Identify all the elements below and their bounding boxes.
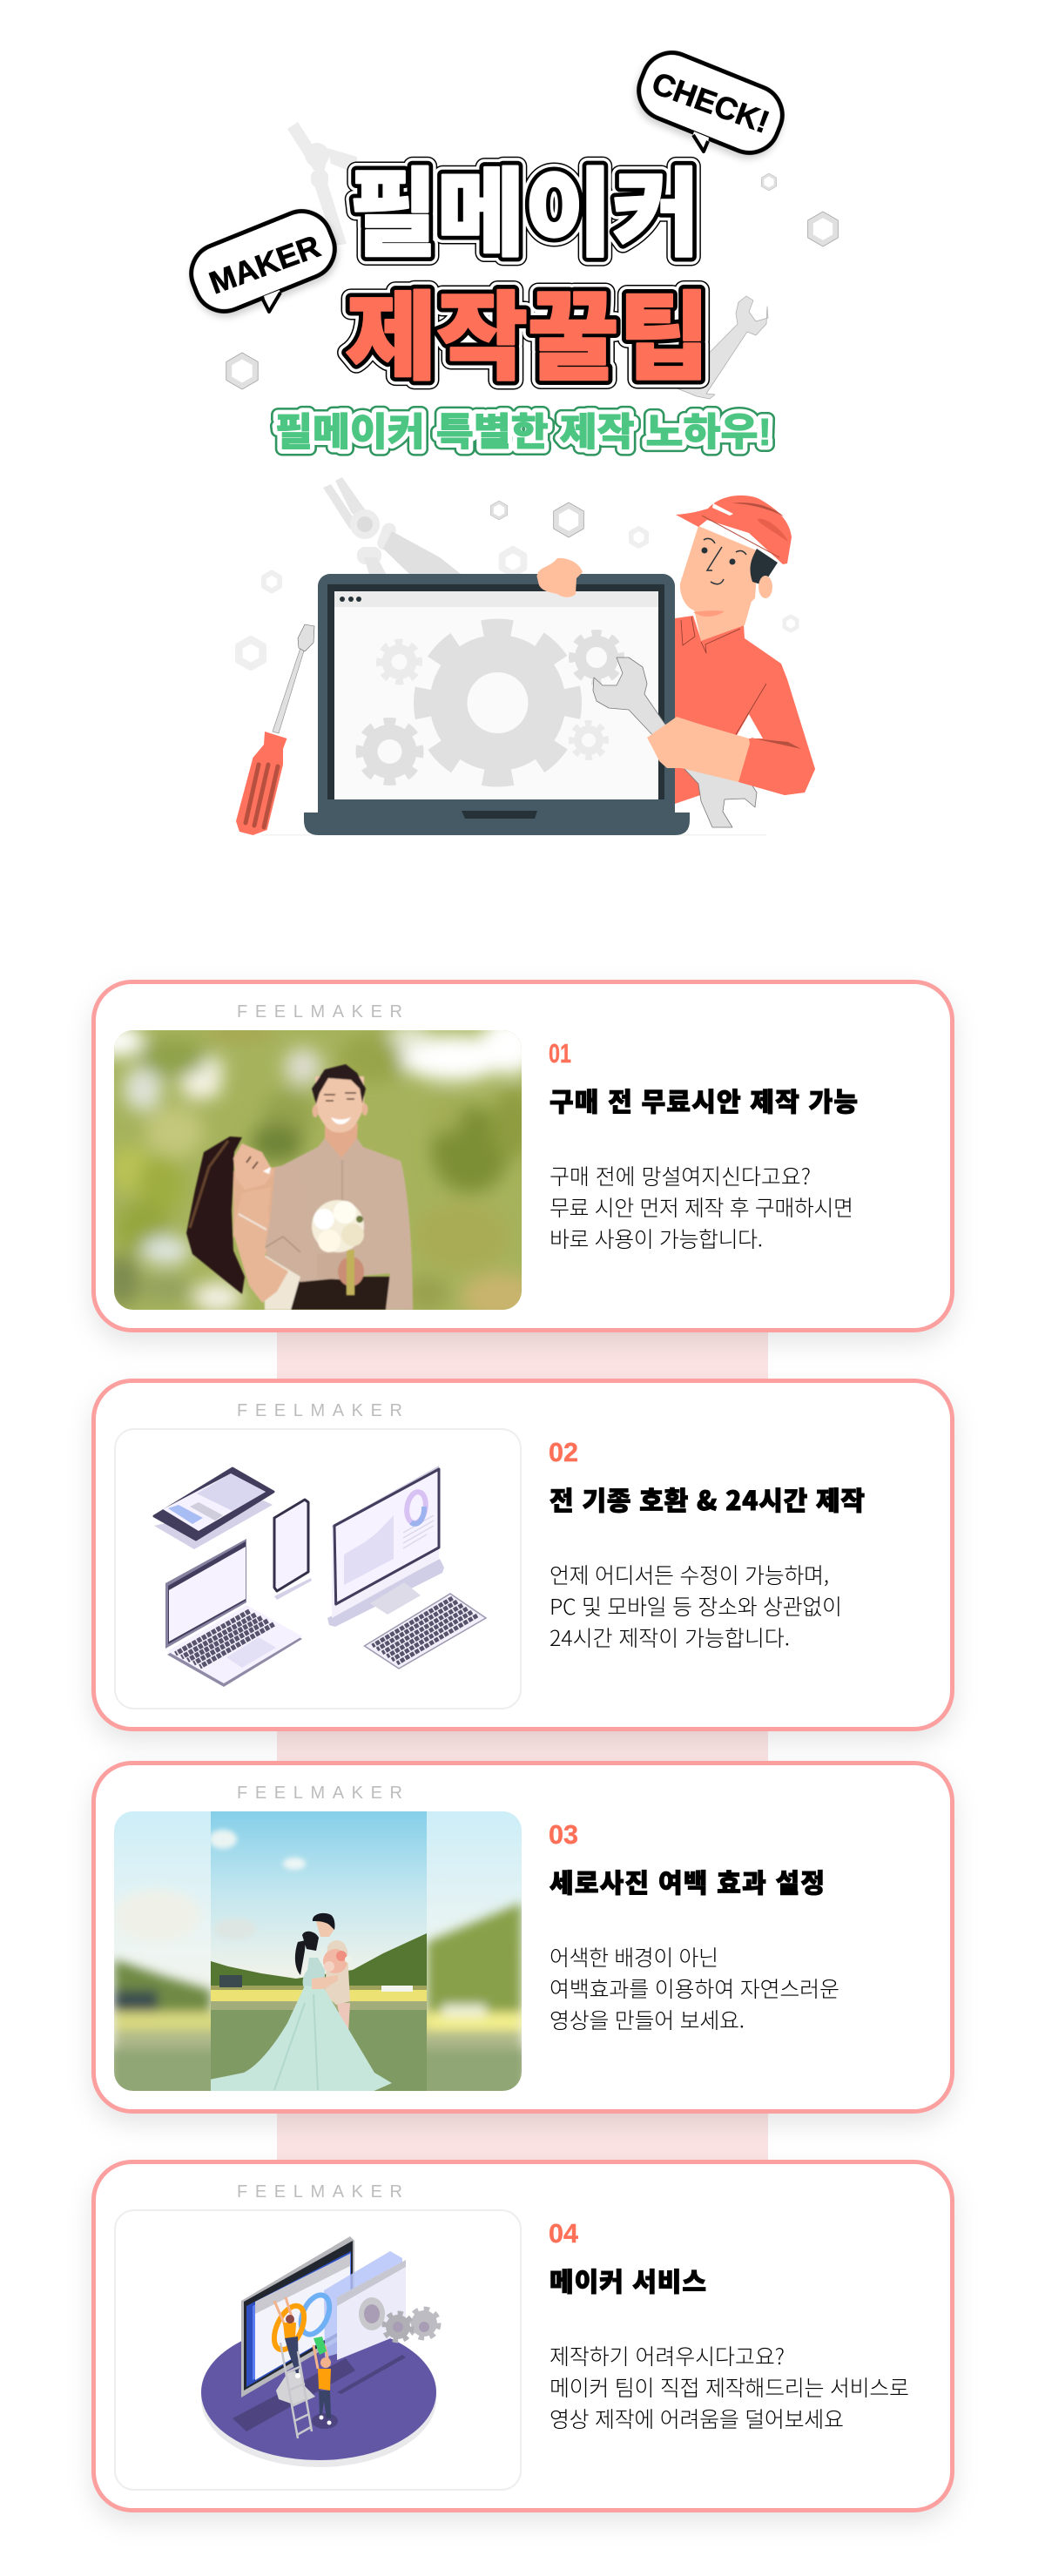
title: 제작꿀팁: 제작꿀팁 (346, 285, 710, 392)
icon: phone (274, 1500, 312, 1600)
subtitle: 필메이커 특별한 제작 노하우!: 필메이커 특별한 제작 노하우! (275, 411, 772, 454)
brand label: FEELMAKER (237, 1002, 402, 1022)
speech bubble: CHECK!: CHECK! (647, 64, 774, 140)
description: 영상 제작에 어려움을 덜어보세요 (549, 2403, 844, 2434)
shoulder and arm (233, 1236, 289, 1303)
subtitle: 필메이커 특별한 제작 노하우!: 필메이커 특별한 제작 노하우! (275, 411, 772, 454)
description: 구매 전에 망설여지신다고요? (549, 1160, 811, 1191)
hero background: tools and nuts (226, 122, 838, 399)
brand label: FEELMAKER (237, 1401, 402, 1420)
title: 필메이커: 필메이커 (349, 161, 700, 268)
description: 어색한 배경이 아닌 (549, 1941, 718, 1972)
subtitle: 필메이커 특별한 제작 노하우!: 필메이커 특별한 제작 노하우! (275, 411, 772, 454)
description: 바로 사용이 가능합니다. (549, 1223, 763, 1254)
icon: gears on screen (361, 629, 621, 781)
icon: gears (359, 2297, 439, 2341)
man sleeve and hand (265, 1165, 281, 1250)
speech bubble: MAKER: MAKER (205, 228, 325, 300)
description: 무료 시안 먼저 제작 후 구매하시면 (549, 1191, 853, 1223)
hair (186, 1136, 245, 1294)
illustration: team building website on monitor (201, 2236, 439, 2467)
person: helmet (676, 496, 792, 564)
icon: wrench (593, 657, 757, 827)
panel: card 02 (94, 1381, 953, 1730)
title: 필메이커: 필메이커 (349, 161, 700, 268)
number: 03 (549, 1819, 578, 1850)
person: cuff (738, 738, 815, 795)
person: hand gripping laptop (536, 558, 583, 597)
person: holding hand and arm (647, 717, 751, 782)
icon: gear lower left (361, 722, 420, 781)
title: 제작꿀팁: 제작꿀팁 (346, 285, 710, 392)
description (549, 1559, 842, 1653)
monitor (241, 2236, 354, 2397)
number: 01 (549, 1038, 571, 1069)
illustration: repairman fixing laptop (236, 477, 815, 836)
icon: gear lower right (571, 723, 606, 758)
description: 언제 어디서든 수정이 가능하며, (549, 1559, 829, 1590)
man (266, 1064, 413, 1310)
description: PC 및 모바일 등 장소와 상관없이 (549, 1590, 842, 1622)
person: neck and head (680, 526, 778, 641)
blue window panels (324, 2251, 402, 2357)
description: 제작하기 어려우시다고요? (549, 2340, 785, 2371)
laptop (304, 574, 690, 835)
face (233, 1143, 273, 1190)
brand label: FEELMAKER (237, 1784, 402, 1803)
description: 24시간 제작이 가능합니다. (549, 1622, 790, 1653)
person standing (312, 2337, 338, 2429)
photo: vertical photo with blurred side margins (109, 1811, 527, 2101)
icon: large gear (423, 629, 571, 777)
icon: tablet (154, 1468, 273, 1549)
photo: smiling couple with bouquet (114, 1030, 522, 1310)
icon: wrench behind title (675, 296, 768, 399)
platform disc (201, 2331, 436, 2467)
image frame (115, 2210, 521, 2490)
illustration: isometric devices (154, 1466, 486, 1687)
heading: 세로사진 여백 효과 설정 (549, 1862, 825, 1900)
title: 제작꿀팁: 제작꿀팁 (346, 285, 710, 392)
description (549, 1941, 839, 2035)
title: 필메이커: 필메이커 (349, 161, 700, 268)
icon: gear upper left (380, 642, 420, 682)
description: 여백효과를 이용하여 자연스러운 (549, 1972, 839, 2004)
description: 메이커 팀이 직접 제작해드리는 서비스로 (549, 2371, 909, 2403)
icon: pliers (323, 477, 461, 575)
number: 04 (549, 2218, 579, 2249)
woman (186, 1136, 300, 1310)
heading: 구매 전 무료시안 제작 가능 (549, 1081, 858, 1119)
description (549, 1160, 853, 1254)
sharp centre photo (209, 1811, 428, 2093)
icon: laptop (165, 1539, 302, 1687)
ground line (261, 834, 766, 836)
person on ladder (274, 2297, 300, 2378)
heading: 전 기종 호환 & 24시간 제작 (549, 1480, 865, 1518)
laptop keyboard keys (176, 1611, 273, 1667)
icon: pliers behind title (287, 122, 357, 246)
title: 필메이커: 필메이커 (349, 161, 700, 268)
icon: nut small (761, 173, 777, 191)
panel: card 04 (94, 2161, 953, 2510)
icon: nut right (808, 212, 838, 246)
icon: monitor (327, 1466, 444, 1627)
speech bubble: CHECK! (630, 44, 791, 162)
person: collar lines (681, 617, 740, 653)
number: 02 (549, 1437, 578, 1467)
image frame (115, 1429, 521, 1709)
panel: card 03 (94, 1763, 953, 2111)
brand label: FEELMAKER (237, 2182, 402, 2202)
description: 영상을 만들어 보세요. (549, 2004, 745, 2035)
pink connector band (277, 1306, 768, 2177)
icon: nuts (239, 501, 797, 667)
ladder (280, 2343, 312, 2438)
bouquet (312, 1200, 364, 1295)
heading: 메이커 서비스 (549, 2261, 706, 2299)
icon: screwdriver (236, 624, 314, 835)
icon: gear upper right (572, 633, 621, 682)
speech bubble: MAKER (183, 202, 343, 320)
couple (209, 1913, 392, 2093)
dress skirt (263, 1254, 300, 1310)
blurred background (109, 1811, 527, 2101)
panel: card 01 (91, 982, 953, 1331)
logo rings on screen (268, 2290, 335, 2354)
icon: keyboard (364, 1594, 486, 1669)
neck and chest (233, 1167, 277, 1241)
description (549, 2340, 909, 2434)
person: shirt (675, 616, 815, 804)
monitor stand (276, 2369, 315, 2405)
icon: nut left (226, 353, 258, 389)
title: 제작꿀팁: 제작꿀팁 (346, 285, 710, 392)
